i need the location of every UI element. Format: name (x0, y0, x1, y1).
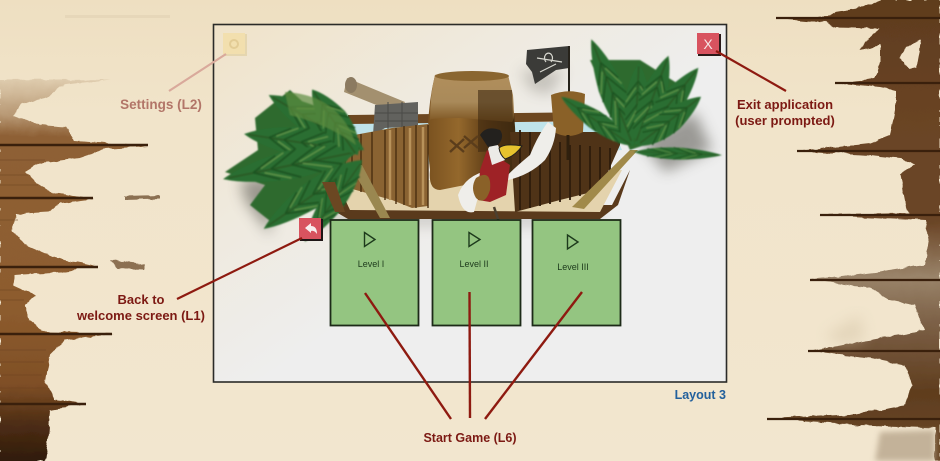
faint top scratch (65, 15, 170, 18)
flag (526, 46, 569, 84)
sand deck (336, 170, 622, 212)
wireframe screen panel (214, 24, 726, 382)
level 2 card: Level II (459, 259, 489, 269)
right fence (510, 130, 620, 212)
cannon barrel (344, 78, 405, 114)
left weathered wood edge (0, 79, 160, 461)
arrow: level 3 to start game (485, 292, 582, 419)
parrot (458, 122, 556, 222)
exit button: X (703, 36, 713, 52)
left palm fronds (220, 81, 371, 248)
right palm trunk (572, 150, 638, 209)
level 3 card (532, 220, 620, 326)
arrow: back (177, 238, 302, 299)
arrow: level 1 to start game (365, 293, 451, 419)
soft drop shadows (240, 70, 712, 235)
label: start game: Start Game (L6) (423, 431, 517, 445)
label: layout number: Layout 3 (675, 388, 726, 402)
arrow: settings (169, 54, 226, 91)
arrow: level 2 to start game (468, 292, 471, 418)
ship hull rim (321, 170, 630, 219)
label: back to welcome screen: Back to (118, 292, 165, 307)
cannon stone base (373, 102, 418, 135)
level 1 card (330, 220, 418, 326)
barrel (428, 72, 516, 190)
label: exit application: (user prompted) (735, 113, 835, 128)
label: exit application: Exit application (737, 97, 833, 112)
sea (350, 122, 622, 170)
label: back to welcome screen: welcome screen (L1) (76, 308, 205, 323)
left palm trunk (350, 165, 390, 218)
level 1 card: Level I (358, 259, 384, 269)
level 2 card (432, 220, 520, 326)
level 3 card: Level III (557, 262, 589, 272)
right palm fronds (556, 35, 722, 161)
ship illustration with palms and pirate parrot (220, 35, 722, 248)
label: settings: Settings (L2) (120, 97, 202, 112)
arrow: exit (716, 51, 786, 91)
exit button (697, 33, 721, 56)
back button (299, 218, 323, 241)
right weathered wood edge (767, 0, 940, 461)
crow's nest (551, 91, 585, 136)
barrel XX marks (450, 136, 478, 152)
left fence (338, 124, 428, 208)
hull prow posts (322, 182, 345, 212)
settings button (223, 33, 247, 56)
rail (348, 112, 600, 124)
